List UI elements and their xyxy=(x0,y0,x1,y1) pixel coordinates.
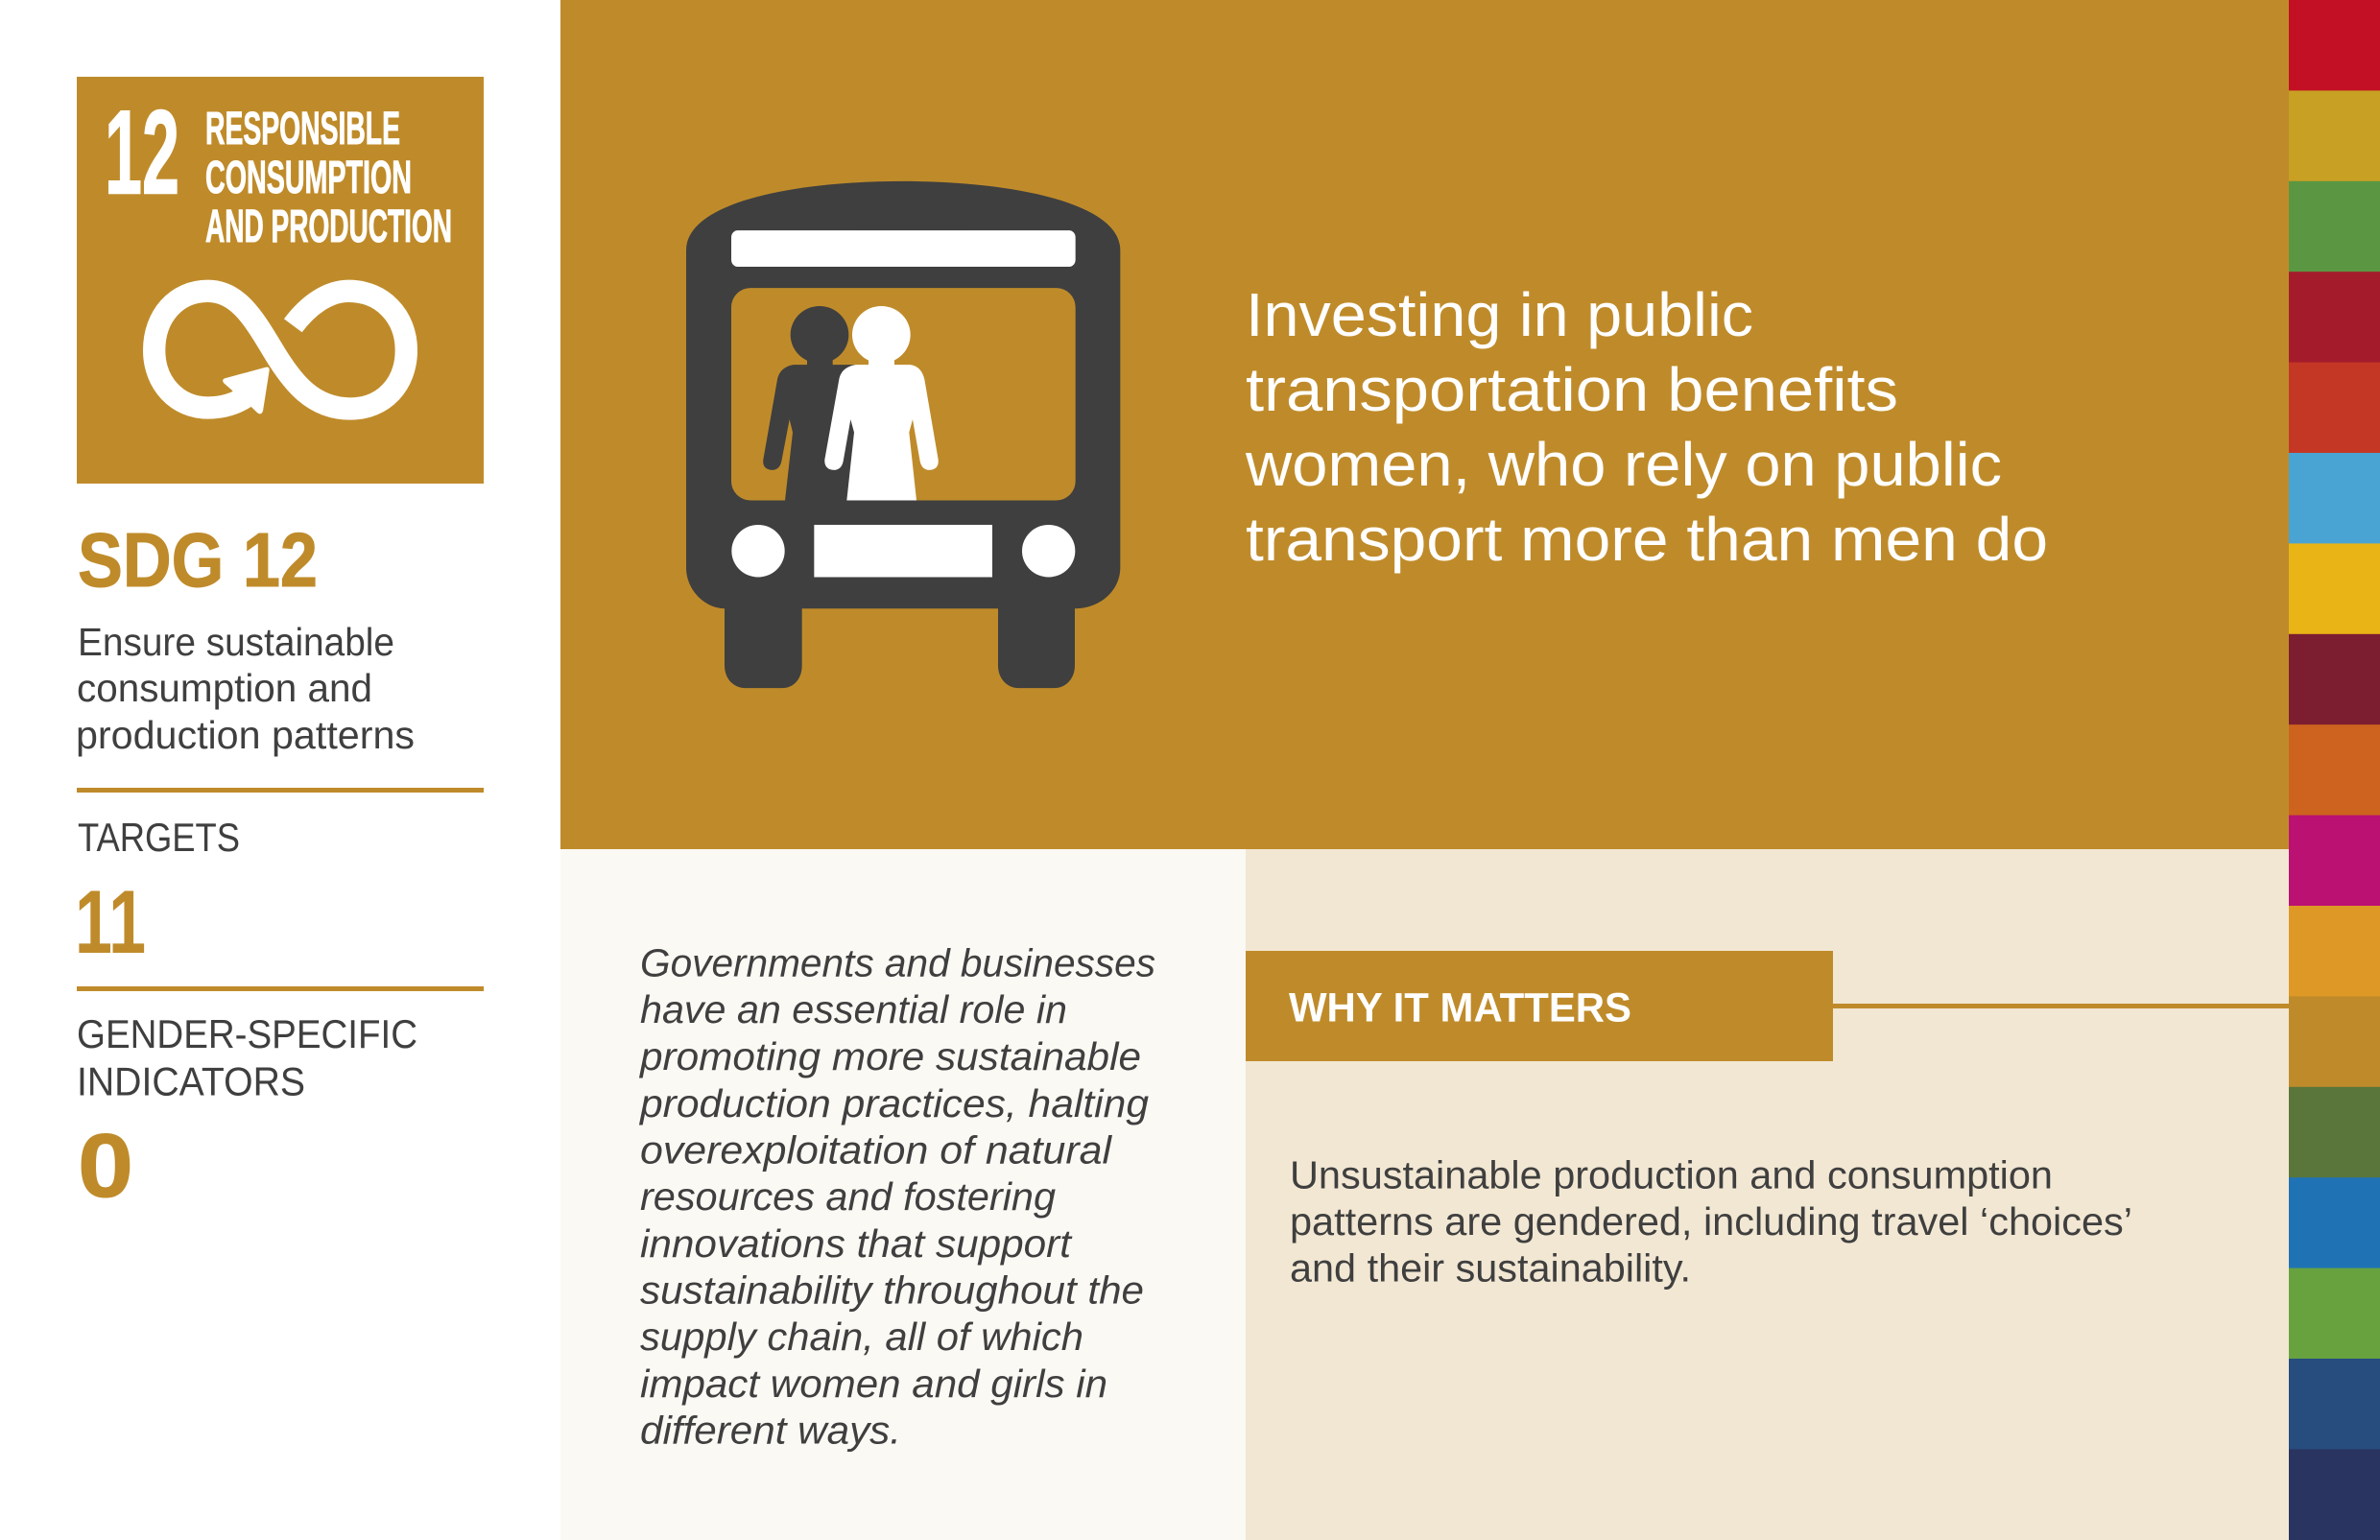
text block: italic introduction: different ways. xyxy=(640,1409,901,1453)
text block: italic introduction: supply chain, all of which xyxy=(640,1315,1083,1359)
label: gender-specific indicators: INDICATORS xyxy=(77,1059,305,1103)
label: gender-specific indicators xyxy=(77,1011,417,1103)
text block: italic introduction: resources and fostering xyxy=(640,1174,1056,1219)
headlights xyxy=(731,525,785,577)
text block: goal description: production patterns xyxy=(76,713,415,757)
passenger: man xyxy=(763,306,857,501)
text block: italic introduction: sustainability throughout the xyxy=(640,1268,1144,1313)
hero statement: women, who rely on public xyxy=(1245,430,2002,499)
text block: goal description: Ensure sustainable xyxy=(78,620,394,664)
tile number: 12 xyxy=(105,86,179,219)
text block: goal description xyxy=(76,620,415,757)
icon: bus with two passengers xyxy=(686,181,1120,688)
text block: italic introduction: have an essential role in xyxy=(640,987,1067,1031)
icon: SDG 12 goal tile xyxy=(77,77,484,484)
text block: why it matters body: Unsustainable production and consumption xyxy=(1290,1153,2053,1197)
destination sign xyxy=(731,230,1076,267)
text block: italic introduction: overexploitation of natural xyxy=(640,1128,1113,1173)
icon: infinity loop arrow xyxy=(155,291,406,414)
bus body xyxy=(686,181,1120,688)
text block: italic introduction xyxy=(638,940,1155,1453)
text block: italic introduction: innovations that support xyxy=(640,1221,1073,1266)
text block: italic introduction: production practices, halting xyxy=(638,1081,1149,1125)
hero statement: Investing in public xyxy=(1246,280,1753,349)
number plate xyxy=(814,525,992,577)
heading: SDG 12: SDG 12 xyxy=(78,517,318,603)
passenger: woman xyxy=(824,306,939,501)
hero statement xyxy=(1245,280,2048,574)
text block: why it matters body: and their sustainability. xyxy=(1290,1245,1691,1290)
heading band: why it matters: WHY IT MATTERS xyxy=(1289,984,1631,1031)
text block: why it matters body xyxy=(1290,1153,2132,1290)
number: 0 indicators: 0 xyxy=(78,1115,133,1216)
label: targets: TARGETS xyxy=(78,815,240,860)
panel: hero banner xyxy=(560,0,2290,849)
tile title: CONSUMPTION xyxy=(205,153,412,203)
tile title xyxy=(205,104,452,252)
text block: goal description: consumption and xyxy=(77,666,372,710)
panel: intro text background xyxy=(560,849,1246,1540)
heading band: why it matters xyxy=(1246,951,1833,1061)
number: 11 targets: 11 xyxy=(75,871,146,972)
panel: why it matters background xyxy=(1246,849,2290,1540)
tile title: AND PRODUCTION xyxy=(205,201,452,252)
text block: italic introduction: Governments and businesses xyxy=(640,940,1155,984)
colour stripe: SDG colours xyxy=(2289,0,2380,1540)
hero statement: transportation benefits xyxy=(1246,355,1898,424)
text block: italic introduction: promoting more sustainable xyxy=(638,1034,1141,1078)
hero statement: transport more than men do xyxy=(1246,505,2048,574)
tile title: RESPONSIBLE xyxy=(205,104,400,154)
label: gender-specific indicators: GENDER-SPECIFIC xyxy=(77,1011,417,1056)
text block: italic introduction: impact women and girls in xyxy=(640,1362,1107,1406)
text block: why it matters body: patterns are gendered, including travel ‘choices’ xyxy=(1290,1199,2132,1244)
windscreen xyxy=(731,288,1076,501)
